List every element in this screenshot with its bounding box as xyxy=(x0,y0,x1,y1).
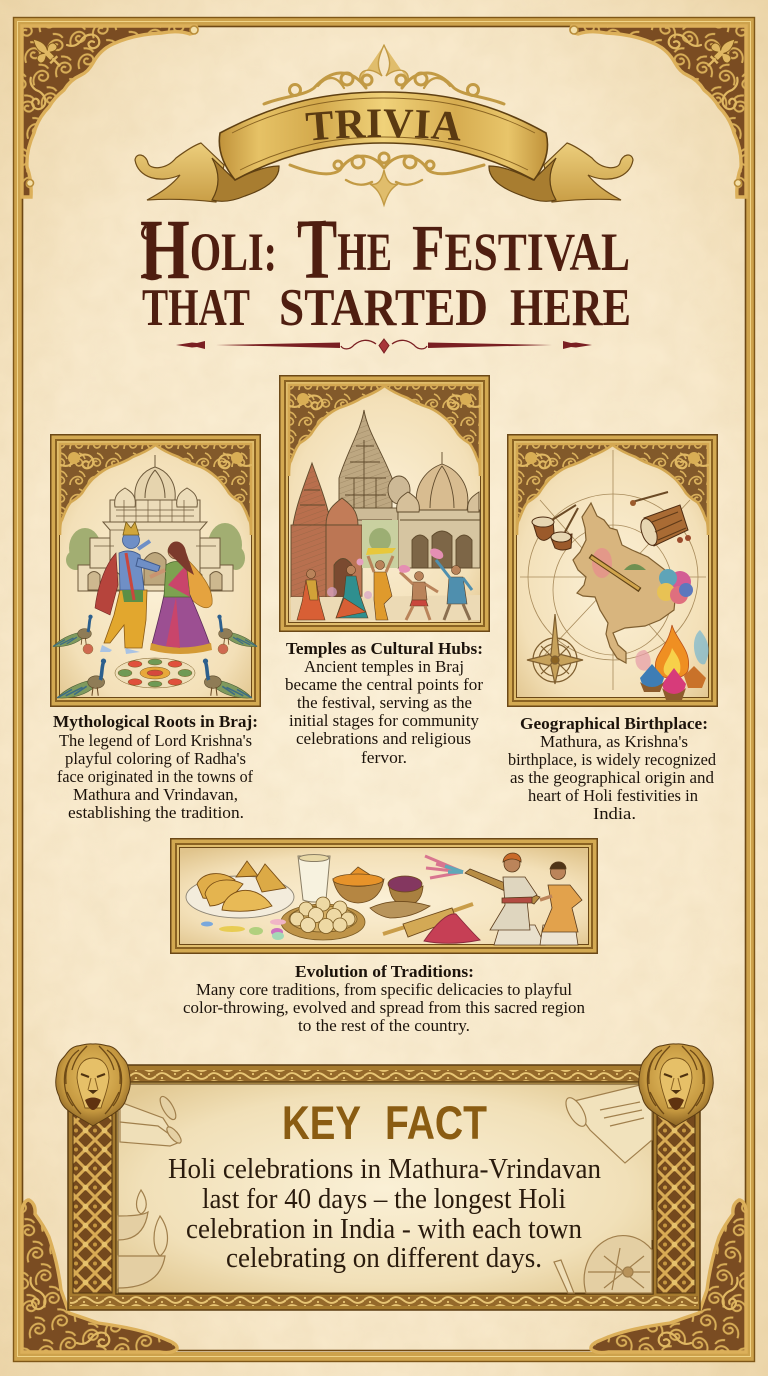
banner label: TRIVIA xyxy=(305,109,460,141)
text: evolution of traditions: color-throwing, evolved and spread from this sacred region xyxy=(183,998,585,1017)
ribbon folds xyxy=(212,158,279,201)
key fact frame xyxy=(68,1065,700,1310)
arch xyxy=(517,444,708,535)
key fact body xyxy=(168,1154,601,1274)
food plate of gujiya xyxy=(186,861,294,918)
text: temples as cultural hubs: the festival, serving as the xyxy=(297,693,472,712)
banner: TRIVIA ribbon xyxy=(134,44,634,208)
text: geographical birthplace: as the geographical origin and xyxy=(510,768,715,787)
panel: key fact xyxy=(56,1044,713,1310)
arch xyxy=(289,385,480,476)
title divider xyxy=(176,339,592,353)
figure: Radha xyxy=(150,542,212,654)
dancers xyxy=(297,548,472,620)
text: geographical birthplace: heart of Holi festivities in xyxy=(528,786,698,805)
key fact body: celebrating on different days. xyxy=(226,1243,542,1274)
scattered colours xyxy=(201,919,286,940)
water jet spray xyxy=(425,856,463,878)
icon: left lion head xyxy=(56,1044,130,1126)
panel: mythological roots illustration xyxy=(50,434,261,707)
text: evolution of traditions xyxy=(183,962,585,1035)
glass of thandai xyxy=(298,854,330,902)
key fact body: celebration in India - with each town xyxy=(186,1214,582,1245)
figure: Krishna xyxy=(95,522,160,654)
rolling pin and red powder xyxy=(383,904,480,943)
peacocks xyxy=(53,615,257,698)
ornament above ribbon xyxy=(264,45,504,104)
text: temples as cultural hubs: initial stages for community xyxy=(289,711,480,730)
figures with pichkari xyxy=(465,853,582,945)
text: mythological roots xyxy=(53,712,258,822)
palace xyxy=(66,455,245,591)
text: geographical birthplace: Geographical Birthplace: xyxy=(520,714,708,733)
title: HERE xyxy=(510,279,631,337)
icon: right lion head xyxy=(639,1044,713,1126)
text: evolution of traditions: to the rest of the country. xyxy=(298,1016,470,1035)
text: geographical birthplace: birthplace, is widely recognized xyxy=(508,750,717,769)
icon: bonfire and colour bowls xyxy=(635,625,709,700)
corner ornament: top left xyxy=(22,26,198,197)
text: temples as cultural hubs: became the central points for xyxy=(285,675,484,694)
text: evolution of traditions: Evolution of Traditions: xyxy=(295,962,474,981)
title: THAT xyxy=(142,279,250,337)
panel: geographical map illustration xyxy=(507,434,718,707)
key fact heading: KEY xyxy=(282,1096,361,1149)
right ribbon tail xyxy=(544,143,633,202)
text: mythological roots: Mythological Roots in Braj: xyxy=(53,712,258,731)
arch xyxy=(60,444,251,535)
Uttar Pradesh map shape xyxy=(573,503,679,663)
title: FESTIVAL xyxy=(412,212,630,285)
icon: dholak drum xyxy=(630,492,691,548)
ornament below ribbon xyxy=(290,153,484,205)
title xyxy=(140,201,631,337)
title: HE xyxy=(337,222,392,282)
spice bowls xyxy=(333,867,430,918)
text: geographical birthplace: India. xyxy=(593,804,636,823)
temple group xyxy=(291,410,480,620)
key fact body: Holi celebrations in Mathura-Vrindavan xyxy=(168,1154,601,1185)
title: STARTED xyxy=(279,279,488,337)
panel: food and traditions illustration xyxy=(170,838,598,954)
text: temples as cultural hubs: fervor. xyxy=(361,748,407,767)
map details xyxy=(590,548,693,604)
text: mythological roots: establishing the tradition. xyxy=(68,803,244,822)
panel: temples illustration xyxy=(279,375,490,632)
title: H xyxy=(140,201,190,297)
text: geographical birthplace: Mathura, as Krishna's xyxy=(540,732,688,751)
sketch decorations: scrolls, diyas, compass xyxy=(118,1085,652,1293)
key fact heading: FACT xyxy=(385,1096,487,1149)
title: T xyxy=(297,201,337,297)
text: temples as cultural hubs: celebrations and religious xyxy=(296,729,471,748)
text: temples as cultural hubs xyxy=(285,639,484,767)
corner ornament: bottom left xyxy=(22,1200,177,1353)
corner ornament: bottom right xyxy=(591,1200,746,1353)
plate of ladoos xyxy=(281,897,365,940)
rangoli xyxy=(83,644,228,688)
text: geographical birthplace xyxy=(508,714,717,823)
map grid xyxy=(520,450,706,690)
icon: tabla drums xyxy=(532,505,578,550)
title: OLI: xyxy=(190,222,277,282)
key fact body: last for 40 days – the longest Holi xyxy=(202,1184,566,1215)
text: evolution of traditions: Many core traditions, from specific delicacies to playful xyxy=(196,980,572,999)
icon: compass rose xyxy=(527,614,583,684)
text: mythological roots: face originated in the towns of xyxy=(57,767,253,786)
left ribbon tail xyxy=(135,143,224,202)
ribbon main band xyxy=(219,92,548,180)
text: mythological roots: playful coloring of Radha's xyxy=(65,749,246,768)
text: temples as cultural hubs: Ancient temples in Braj xyxy=(304,657,464,676)
key fact heading xyxy=(282,1096,487,1149)
corner ornament: top right xyxy=(570,26,746,197)
text: temples as cultural hubs: Temples as Cultural Hubs: xyxy=(286,639,483,658)
text: mythological roots: Mathura and Vrindavan, xyxy=(73,785,238,804)
text: mythological roots: The legend of Lord Krishna's xyxy=(59,731,252,750)
